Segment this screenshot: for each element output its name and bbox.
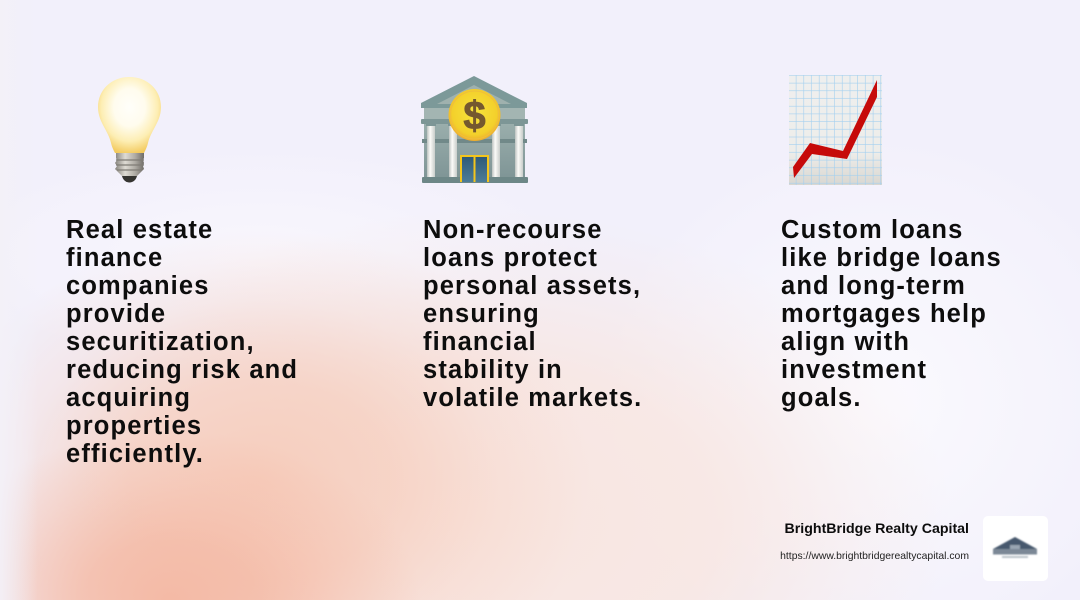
coin	[448, 89, 500, 141]
text: securitization: provide	[66, 300, 166, 328]
text: non-recourse loans: financial	[423, 328, 537, 356]
text: custom loans: and long-term	[781, 272, 966, 300]
text: custom loans: investment	[781, 356, 927, 384]
icon: bank with dollar coin: $	[463, 94, 486, 138]
brand name: BrightBridge Realty Capital	[785, 521, 969, 537]
text: custom loans: align with	[781, 328, 910, 356]
text: non-recourse loans: personal assets,	[423, 272, 641, 300]
text: non-recourse loans: loans protect	[423, 244, 598, 272]
text: custom loans: mortgages help	[781, 300, 987, 328]
logo tile	[983, 516, 1048, 581]
columns	[426, 123, 436, 126]
text: custom loans	[781, 216, 1002, 412]
text: securitization: properties	[66, 412, 202, 440]
pediment	[421, 76, 527, 108]
door	[460, 155, 489, 182]
text: securitization: acquiring	[66, 384, 191, 412]
icon: bank with dollar coin	[421, 76, 528, 183]
text: securitization: companies	[66, 272, 210, 300]
text: non-recourse loans: Non-recourse	[423, 216, 603, 244]
brand url: https://www.brightbridgerealtycapital.com	[780, 550, 969, 562]
lower wall	[424, 124, 525, 178]
text: non-recourse loans: ensuring	[423, 300, 540, 328]
text: non-recourse loans: volatile markets.	[423, 384, 642, 412]
text: custom loans: like bridge loans	[781, 244, 1002, 272]
text: securitization: securitization,	[66, 328, 255, 356]
upper wall	[424, 108, 525, 120]
text: securitization: Real estate	[66, 216, 213, 244]
text: non-recourse loans	[423, 216, 642, 412]
text: non-recourse loans: stability in	[423, 356, 563, 384]
logo mark	[992, 536, 1038, 559]
text: securitization: finance	[66, 244, 163, 272]
text: custom loans: goals.	[781, 384, 862, 412]
icon: light bulb	[98, 77, 161, 182]
text: securitization: reducing risk and	[66, 356, 298, 384]
text: securitization	[66, 216, 298, 468]
text: custom loans: Custom loans	[781, 216, 963, 244]
text: securitization: efficiently.	[66, 440, 204, 468]
icon: chart with upward trend	[789, 75, 882, 185]
